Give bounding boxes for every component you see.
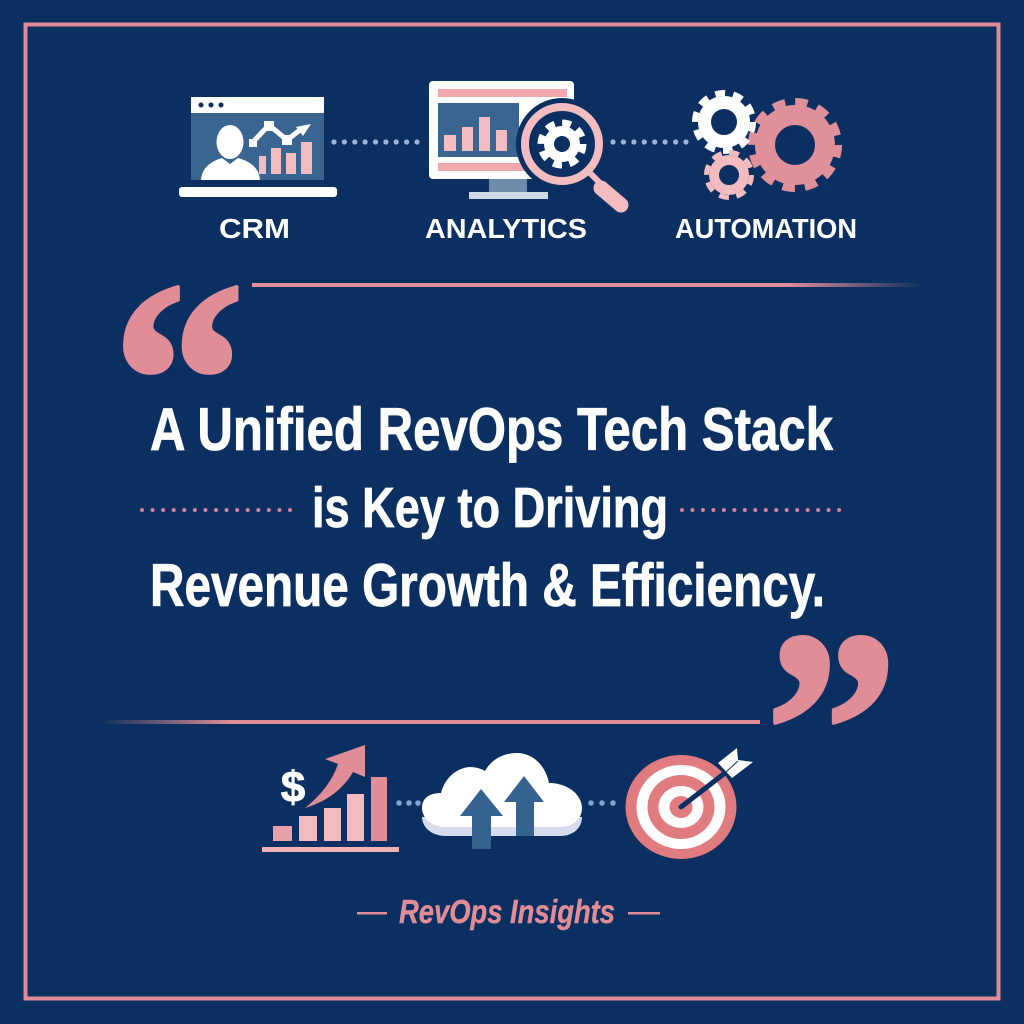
icon: CRM laptop xyxy=(179,97,337,197)
icon: automation gears xyxy=(695,93,838,198)
opening quotation mark: “ xyxy=(112,222,245,538)
icon: analytics monitor with magnifier xyxy=(429,81,621,205)
dotted connector: Analytics to Automation xyxy=(610,139,689,145)
decorative dots left xyxy=(142,508,291,512)
icon: target with arrow xyxy=(626,748,753,859)
label: CRM: CRM xyxy=(219,213,290,244)
dotted connector: cloud to target xyxy=(588,800,616,806)
attribution: RevOps Insights xyxy=(399,893,615,930)
top rule xyxy=(252,283,922,287)
icon: cloud with upward arrows xyxy=(422,753,582,849)
dotted connector: CRM to Analytics xyxy=(331,139,420,145)
quote line 1: A Unified RevOps Tech Stack xyxy=(150,396,834,463)
quote line 3: Revenue Growth & Efficiency. xyxy=(150,552,825,619)
icon: revenue growth chart: $ xyxy=(281,763,305,812)
quote line 2: is Key to Driving xyxy=(312,476,668,540)
label: Analytics: ANALYTICS xyxy=(425,213,587,244)
label: Automation: AUTOMATION xyxy=(675,213,857,244)
closing quotation mark: ” xyxy=(765,572,898,888)
bottom rule xyxy=(100,720,760,724)
dotted connector: chart to cloud xyxy=(396,800,421,806)
decorative dots right xyxy=(682,508,841,512)
icon: revenue growth chart xyxy=(262,745,399,852)
